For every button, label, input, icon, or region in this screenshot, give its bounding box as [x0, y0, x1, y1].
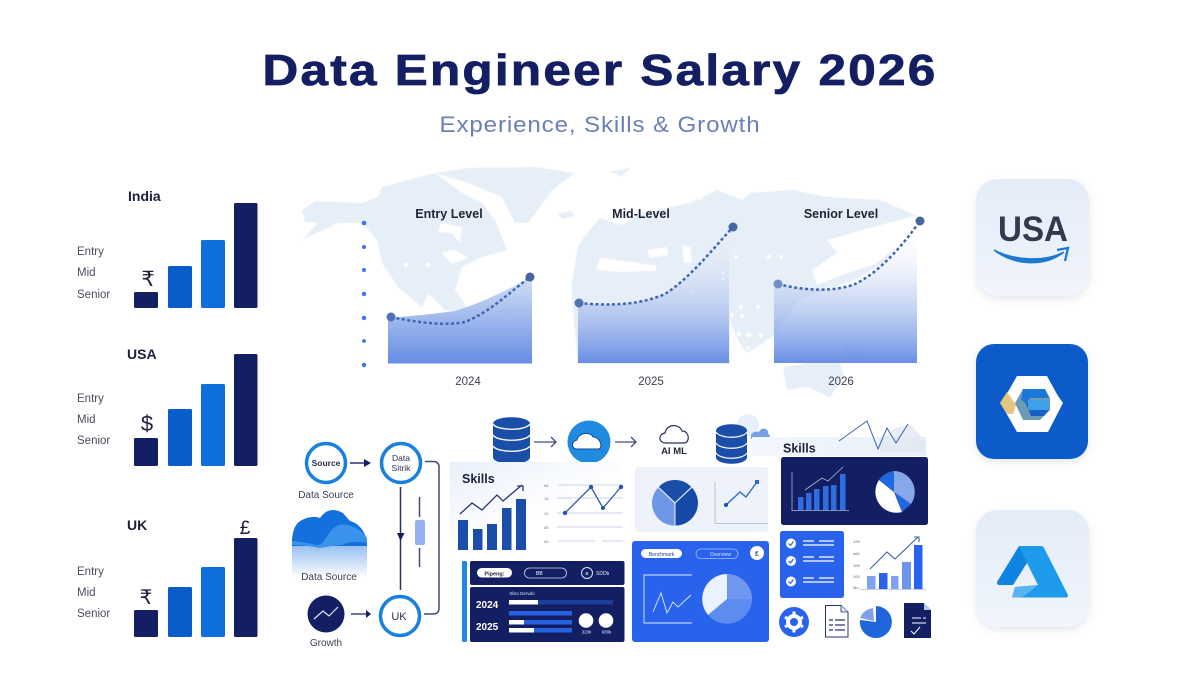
icon: database [493, 417, 530, 464]
dark body: 680k [602, 630, 612, 634]
UK node [380, 596, 420, 636]
senior level chart: 2026 [828, 376, 854, 388]
vertical dots [362, 221, 366, 367]
pie chart [875, 471, 915, 513]
line chart [715, 480, 768, 524]
bar chart with trend: 105 [853, 563, 860, 568]
check items [786, 538, 834, 586]
India bar chart: India [128, 188, 161, 204]
panel: country salary bars [77, 188, 258, 637]
senior level chart: Senior Level [804, 207, 878, 221]
panel: experience level timeline [362, 207, 924, 388]
dark body: 320k [582, 630, 592, 634]
entry level chart [386, 207, 534, 388]
panel: skills chart left [450, 462, 623, 550]
icon: AI ML cloud [660, 426, 688, 457]
USA bar chart: Mid [77, 414, 96, 426]
UK bar chart: Senior [77, 608, 110, 620]
UK bar chart [77, 517, 258, 637]
pipeline icons [493, 414, 770, 464]
skills heading: Skills [462, 472, 495, 486]
skills band with sparkline [752, 421, 926, 456]
UK node: UK [391, 611, 407, 623]
dashboard line chart [644, 575, 692, 623]
icon: database [716, 424, 747, 464]
line chart: 04 [544, 483, 549, 488]
India bar chart [77, 188, 258, 308]
icon: pie [860, 606, 892, 638]
data source label: Data Source [298, 490, 354, 501]
source node [306, 444, 346, 482]
arrow [615, 437, 636, 447]
dark header: BB [536, 571, 543, 577]
dashboard pie [702, 574, 752, 624]
bar chart with trend: Mo [853, 585, 859, 590]
bar chart with trend: 125 [853, 539, 860, 544]
panel: dark salary table [462, 561, 624, 642]
arrow: sink to UK [397, 487, 404, 590]
data source cloud label: Data Source [301, 572, 357, 583]
icon: document [826, 606, 848, 637]
pie chart [652, 479, 698, 526]
bracket connector [424, 462, 439, 614]
India bar chart: Entry [77, 246, 104, 258]
panel: data flow diagram [292, 444, 439, 649]
bar chart with trend [853, 537, 926, 590]
dark header: Pipeng: [484, 572, 505, 578]
line chart: 10 [544, 511, 549, 516]
card: USA logo [976, 179, 1089, 296]
entry level chart: Entry Level [415, 207, 483, 221]
bar chart [458, 499, 526, 550]
subtitle: Experience, Skills & Growth [440, 112, 760, 137]
USA bar chart: $ [141, 411, 153, 436]
world map background [302, 167, 925, 397]
UK bar chart: Entry [77, 566, 104, 578]
source node: Source [312, 458, 341, 468]
data sink node: Sitrik [392, 463, 411, 473]
line chart: 05 [544, 525, 549, 530]
UK bar chart: Mid [77, 587, 96, 599]
axes and trend [792, 467, 849, 510]
growth label: Growth [310, 638, 342, 649]
arrow [534, 437, 556, 447]
dark header [470, 561, 624, 585]
line chart: 10 [544, 496, 549, 501]
data sink node [382, 444, 420, 482]
entry level chart: 2024 [455, 376, 481, 388]
title: Data Engineer Salary 2026 [262, 47, 938, 95]
side pill [415, 497, 425, 567]
arrow: growth to UK [351, 610, 371, 618]
dashboard pills: ₤ [755, 551, 759, 558]
dark header: B [585, 571, 589, 576]
data sink node: Data [392, 453, 410, 463]
icon: gear [779, 607, 809, 637]
skills heading: Skills [783, 442, 816, 456]
icon: faint cloud [737, 414, 770, 439]
growth icon [308, 596, 344, 632]
mid level chart [574, 207, 738, 388]
bars [798, 474, 846, 510]
USA bar chart: Senior [77, 435, 110, 447]
dark body: Sbro Dervdo [509, 591, 535, 596]
dark body: 2025 [476, 622, 499, 633]
arrow: source to sink [350, 459, 371, 467]
mid level chart: 2025 [638, 376, 664, 388]
USA bar chart [77, 346, 258, 466]
icon: layered cloud [292, 510, 367, 578]
USA bar chart: USA [127, 346, 157, 362]
trend arrow [460, 485, 523, 514]
dashboard pills [641, 546, 764, 560]
dashboard pills: Benchmark [649, 552, 675, 558]
line chart [544, 483, 623, 544]
card: triangle logo [976, 510, 1089, 627]
dark header: SDDb [596, 571, 610, 577]
UK bar chart: £ [240, 518, 251, 539]
senior level chart [774, 207, 924, 388]
India bar chart: ₹ [141, 267, 155, 291]
India bar chart: Mid [77, 267, 96, 279]
card: hexagon logo [976, 344, 1088, 459]
India bar chart: Senior [77, 289, 110, 301]
panel: dark skills dashboard [781, 457, 928, 525]
USA bar chart: Entry [77, 393, 104, 405]
icon: AI ML cloud: AI ML [661, 446, 687, 457]
card: USA logo: USA [998, 210, 1068, 249]
mid level chart: Mid-Level [612, 207, 670, 221]
accent strip [462, 561, 467, 642]
line chart: 20 [544, 539, 549, 544]
dark body: 2024 [476, 600, 499, 611]
bar chart with trend: mi5 [853, 551, 860, 556]
dark body [470, 587, 624, 642]
panel: blue dashboard [632, 541, 769, 642]
panel: light pie and line [635, 467, 768, 532]
icon: cloud circle [568, 420, 610, 464]
icon: dark document [904, 603, 931, 638]
UK bar chart: ₹ [140, 585, 152, 609]
bar chart with trend: 100 [853, 574, 860, 579]
UK bar chart: UK [127, 517, 147, 533]
dashboard pills: Overview [710, 552, 731, 558]
panel: checklist [780, 531, 844, 598]
